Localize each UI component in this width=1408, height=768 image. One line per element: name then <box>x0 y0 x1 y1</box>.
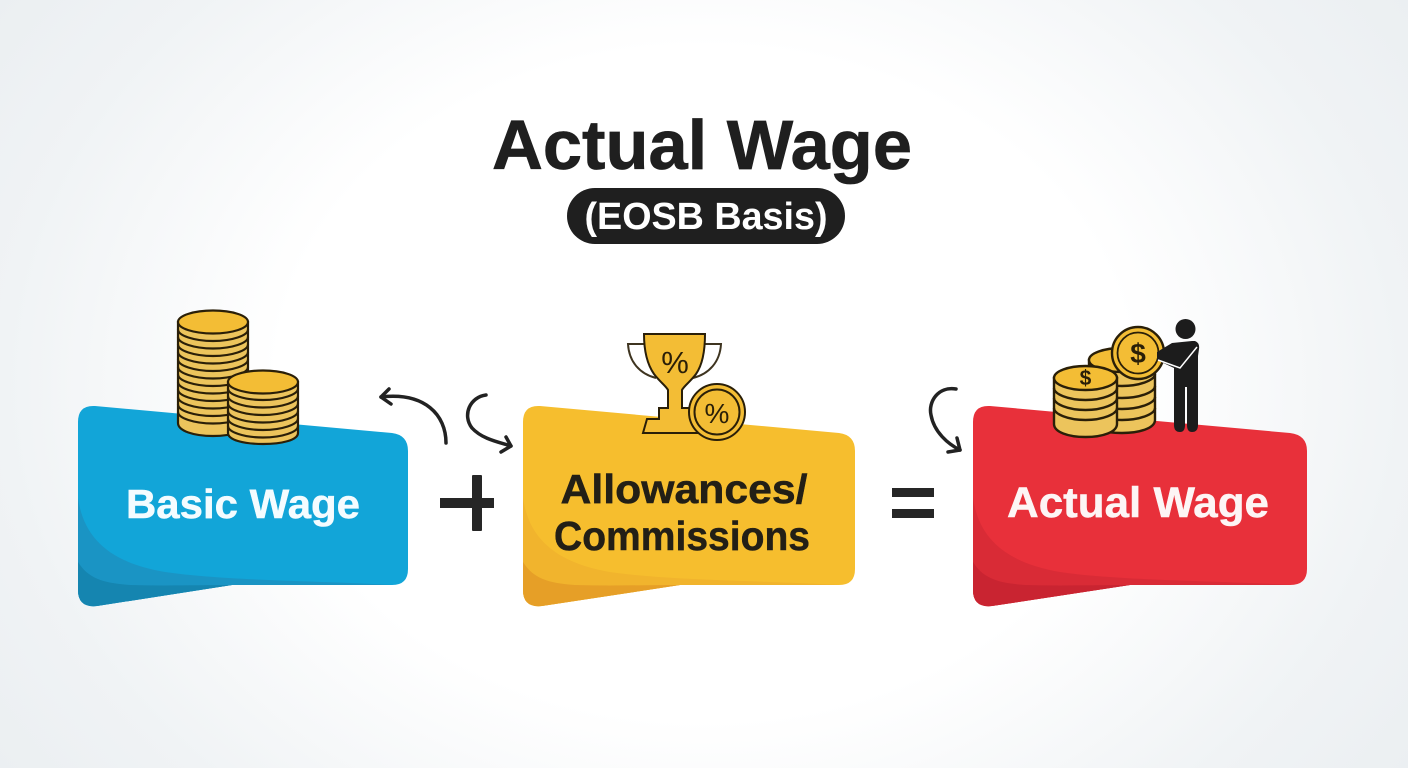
subtitle pill: (EOSB Basis) <box>584 196 828 238</box>
equals sign <box>892 488 934 518</box>
icon: front coin stack <box>1054 366 1117 437</box>
icon: coin stacks <box>178 310 298 444</box>
label: allowances/commissions: Allowances/ <box>560 466 808 512</box>
arrow: curved left <box>381 389 446 443</box>
panel: allowances and commissions <box>523 334 855 606</box>
label: allowances/commissions <box>554 466 810 559</box>
panel: basic wage <box>78 310 408 606</box>
icon: large dollar coin <box>1112 327 1164 379</box>
icon: back coin stack <box>1089 348 1155 433</box>
arrow: curved into result <box>930 389 960 452</box>
icon: front coin stack: $ <box>1080 367 1092 390</box>
subtitle pill <box>567 188 845 244</box>
arrow: curved right <box>468 395 511 452</box>
label: basic wage: Basic Wage <box>126 481 360 527</box>
panel: actual wage result <box>973 319 1307 606</box>
icon: large dollar coin: $ <box>1130 338 1146 369</box>
title: Actual Wage <box>492 106 912 184</box>
label: actual wage: Actual Wage <box>1007 479 1269 527</box>
icon: person <box>1157 319 1199 432</box>
icon: trophy with percent coin: % <box>661 345 689 380</box>
icon: trophy with percent coin: % <box>705 398 729 429</box>
icon: trophy with percent coin <box>628 334 745 440</box>
label: allowances/commissions: Commissions <box>554 513 810 559</box>
plus sign <box>440 475 494 531</box>
